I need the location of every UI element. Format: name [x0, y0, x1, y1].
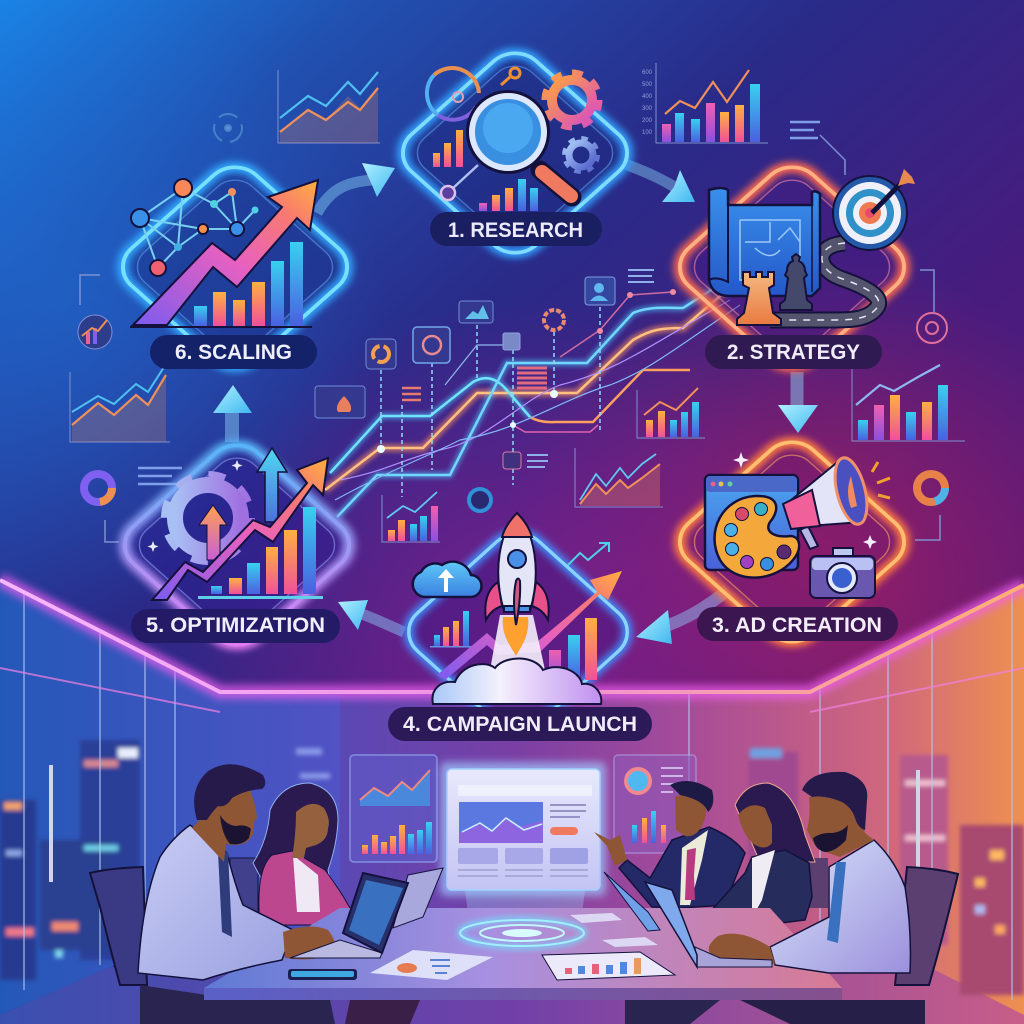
chart top right: 500	[642, 82, 653, 88]
icon tile: person	[585, 277, 615, 305]
shirt	[293, 855, 320, 912]
left glass wall	[0, 580, 340, 1015]
blazer	[259, 851, 350, 925]
label: 4. campaign launch: 4. CAMPAIGN LAUNCH	[403, 713, 637, 736]
small papers	[570, 913, 658, 947]
icon: small bars bottom	[479, 179, 538, 211]
torso and arm	[770, 840, 910, 973]
screen	[343, 873, 408, 953]
neon frame	[113, 434, 361, 656]
glass panel frames	[0, 592, 1024, 1000]
icon: palette	[714, 496, 799, 578]
label: 2. strategy: 2. STRATEGY	[727, 341, 860, 364]
icon: bars right	[549, 618, 597, 680]
right woman's chair	[808, 858, 828, 908]
neon frame	[111, 156, 359, 378]
near laptop base	[695, 947, 772, 967]
face	[675, 794, 706, 836]
purple glow behind launch	[180, 300, 860, 980]
chart top right: 600	[642, 70, 653, 76]
left chairs	[90, 858, 258, 985]
icon tile: donut	[366, 339, 396, 369]
chart top right	[642, 63, 768, 143]
icon: camera	[810, 548, 875, 598]
hand	[709, 934, 775, 964]
person: left woman	[253, 783, 350, 925]
hologram panel: right charts	[614, 755, 696, 853]
right man's chair	[895, 867, 958, 985]
node 4: campaign launch	[396, 513, 640, 741]
neon frame	[668, 431, 916, 653]
office room	[0, 580, 1024, 1024]
icon: small up arrow	[199, 505, 227, 560]
icon: red list small	[402, 388, 421, 400]
chart right	[852, 365, 965, 441]
hair	[735, 783, 815, 862]
icon: rocket	[485, 513, 549, 625]
connector lines	[80, 135, 940, 542]
icon: gear cluster	[544, 310, 564, 330]
icon: road	[770, 243, 879, 320]
icon: rising arrow	[152, 458, 328, 600]
icon: cloud upload	[413, 562, 482, 597]
hologram projector light	[465, 890, 585, 930]
sparkles	[733, 452, 877, 549]
phone	[288, 969, 357, 980]
list lines	[138, 122, 820, 484]
left woman's chair	[230, 858, 258, 920]
icon: gear	[166, 476, 250, 560]
person: left man	[138, 764, 335, 980]
icon: tall up arrow	[257, 448, 287, 522]
near laptop lid	[645, 882, 697, 967]
icon: bars	[130, 242, 312, 328]
process arrows	[213, 163, 818, 644]
hair	[670, 781, 713, 812]
chart top right: 100	[642, 130, 653, 136]
icon: rook	[737, 272, 781, 325]
arrow: launch to optimization	[338, 600, 404, 632]
neon frame	[391, 42, 639, 264]
icon: red list panel	[517, 368, 547, 388]
person: middle right man	[594, 781, 745, 908]
label: 2. strategy	[705, 335, 882, 369]
arrow: ad creation to launch	[636, 590, 728, 644]
neon frame	[396, 523, 640, 741]
icon tile: check	[503, 333, 520, 350]
left city lights	[0, 740, 330, 980]
blazer	[709, 850, 812, 930]
tie	[218, 852, 232, 937]
hologram main screen	[440, 762, 606, 896]
conference table	[204, 908, 842, 1000]
icon: donut below lines	[469, 489, 491, 511]
beard	[813, 825, 848, 852]
right chairs	[808, 858, 958, 985]
data flow lines	[325, 283, 740, 517]
sparkles	[148, 460, 242, 552]
icon: megaphone	[783, 455, 890, 549]
label: 1. research: 1. RESEARCH	[448, 219, 583, 242]
node 2: strategy	[668, 156, 916, 378]
icon: target right	[917, 313, 947, 343]
node 3: ad creation	[668, 431, 916, 653]
label: 3. ad creation: 3. AD CREATION	[712, 614, 882, 637]
hand	[283, 926, 335, 959]
face	[738, 805, 772, 848]
icon: small network top left	[214, 114, 242, 142]
screen charts	[349, 880, 403, 945]
arrow: optimization to scaling	[213, 385, 252, 442]
icon: bishop	[780, 254, 812, 310]
icon: rising arrow	[133, 180, 318, 325]
icon: donut left	[84, 474, 112, 502]
icon: bars left	[430, 611, 472, 648]
hand	[686, 909, 714, 927]
blue glow left	[0, 0, 380, 620]
icon: small chart left	[78, 315, 112, 349]
icon: bars	[198, 507, 323, 599]
keyboard base	[290, 940, 382, 958]
node 6: scaling	[111, 156, 359, 378]
icon: target with arrow	[833, 169, 915, 250]
shirt	[752, 850, 775, 918]
icon: exhaust	[490, 615, 545, 670]
under table legs	[140, 985, 925, 1024]
laptops right	[604, 872, 772, 967]
chart top right: 300	[642, 106, 653, 112]
label: 5. optimization: 5. OPTIMIZATION	[146, 614, 325, 637]
tie	[685, 848, 696, 900]
hair	[194, 764, 265, 820]
floor	[0, 967, 1024, 1024]
far laptop	[604, 872, 660, 931]
icon tile: image	[459, 301, 493, 323]
chart center left small	[382, 492, 440, 542]
report paper left	[370, 950, 493, 980]
node 1: research	[391, 42, 639, 264]
label: 3. ad creation	[697, 607, 898, 641]
small floating icons	[78, 114, 947, 542]
icon: magnifying glass	[466, 90, 572, 197]
icon tile: link	[503, 452, 521, 469]
label: 6. scaling: 6. SCALING	[175, 341, 292, 364]
icon: flame	[503, 617, 528, 656]
hair	[253, 783, 338, 880]
silver laptop	[393, 868, 443, 928]
chart left	[70, 364, 170, 442]
person: right man	[709, 772, 910, 973]
arrow: strategy to ad creation	[778, 372, 818, 433]
pointing hand	[594, 832, 627, 866]
chart top left	[278, 70, 380, 143]
report paper right	[542, 952, 675, 980]
label: 5. optimization	[131, 609, 340, 643]
face	[292, 804, 329, 858]
icon: donut right	[917, 474, 945, 502]
icon: orange gear	[546, 74, 598, 126]
face and neck	[192, 789, 257, 862]
chart top right: 200	[642, 118, 653, 124]
label: 6. scaling	[150, 335, 317, 369]
arrow: scaling to research	[317, 163, 395, 213]
hair	[802, 772, 867, 830]
icon: smoke cloud	[432, 658, 601, 704]
back wall centre	[340, 692, 690, 920]
icon: slate gear	[565, 139, 597, 171]
icon: node link	[441, 165, 478, 200]
tie	[827, 862, 846, 943]
right city lights	[748, 748, 1024, 995]
label: 4. campaign launch	[388, 707, 652, 741]
beard	[220, 815, 251, 844]
icon tile: dashboard	[315, 386, 365, 418]
face and neck	[807, 797, 874, 857]
icon: small bars left	[433, 130, 463, 167]
left man's chair	[90, 867, 147, 985]
arrow: research to strategy	[623, 163, 695, 202]
icon: browser window	[705, 475, 798, 570]
shirt	[680, 830, 708, 905]
chart center right small	[637, 388, 705, 438]
person: middle right woman	[686, 783, 815, 930]
door handles	[51, 765, 918, 882]
icon: lists	[527, 270, 654, 467]
icon: blueprint map	[709, 188, 820, 296]
neon ceiling line	[0, 580, 1024, 692]
projector rings	[460, 919, 584, 947]
node 5: optimization	[113, 434, 361, 656]
magenta glow behind ad creation	[500, 250, 1024, 870]
background	[0, 0, 1024, 700]
torso and arm	[138, 825, 293, 980]
icon: dial	[427, 68, 479, 120]
icon: key	[501, 68, 520, 85]
laptop left	[290, 868, 443, 958]
chart center lower	[575, 448, 663, 507]
icon: network	[131, 179, 258, 276]
hologram panel: left charts	[350, 755, 437, 862]
neon frame	[668, 156, 916, 378]
icon: small arrow	[568, 543, 609, 565]
suit	[619, 827, 745, 908]
chart top right: 400	[642, 94, 653, 100]
label: 1. research	[430, 212, 602, 246]
icon tile: target	[413, 327, 450, 363]
right glass wall	[690, 585, 1024, 1015]
icon: rising arrow	[437, 571, 622, 680]
